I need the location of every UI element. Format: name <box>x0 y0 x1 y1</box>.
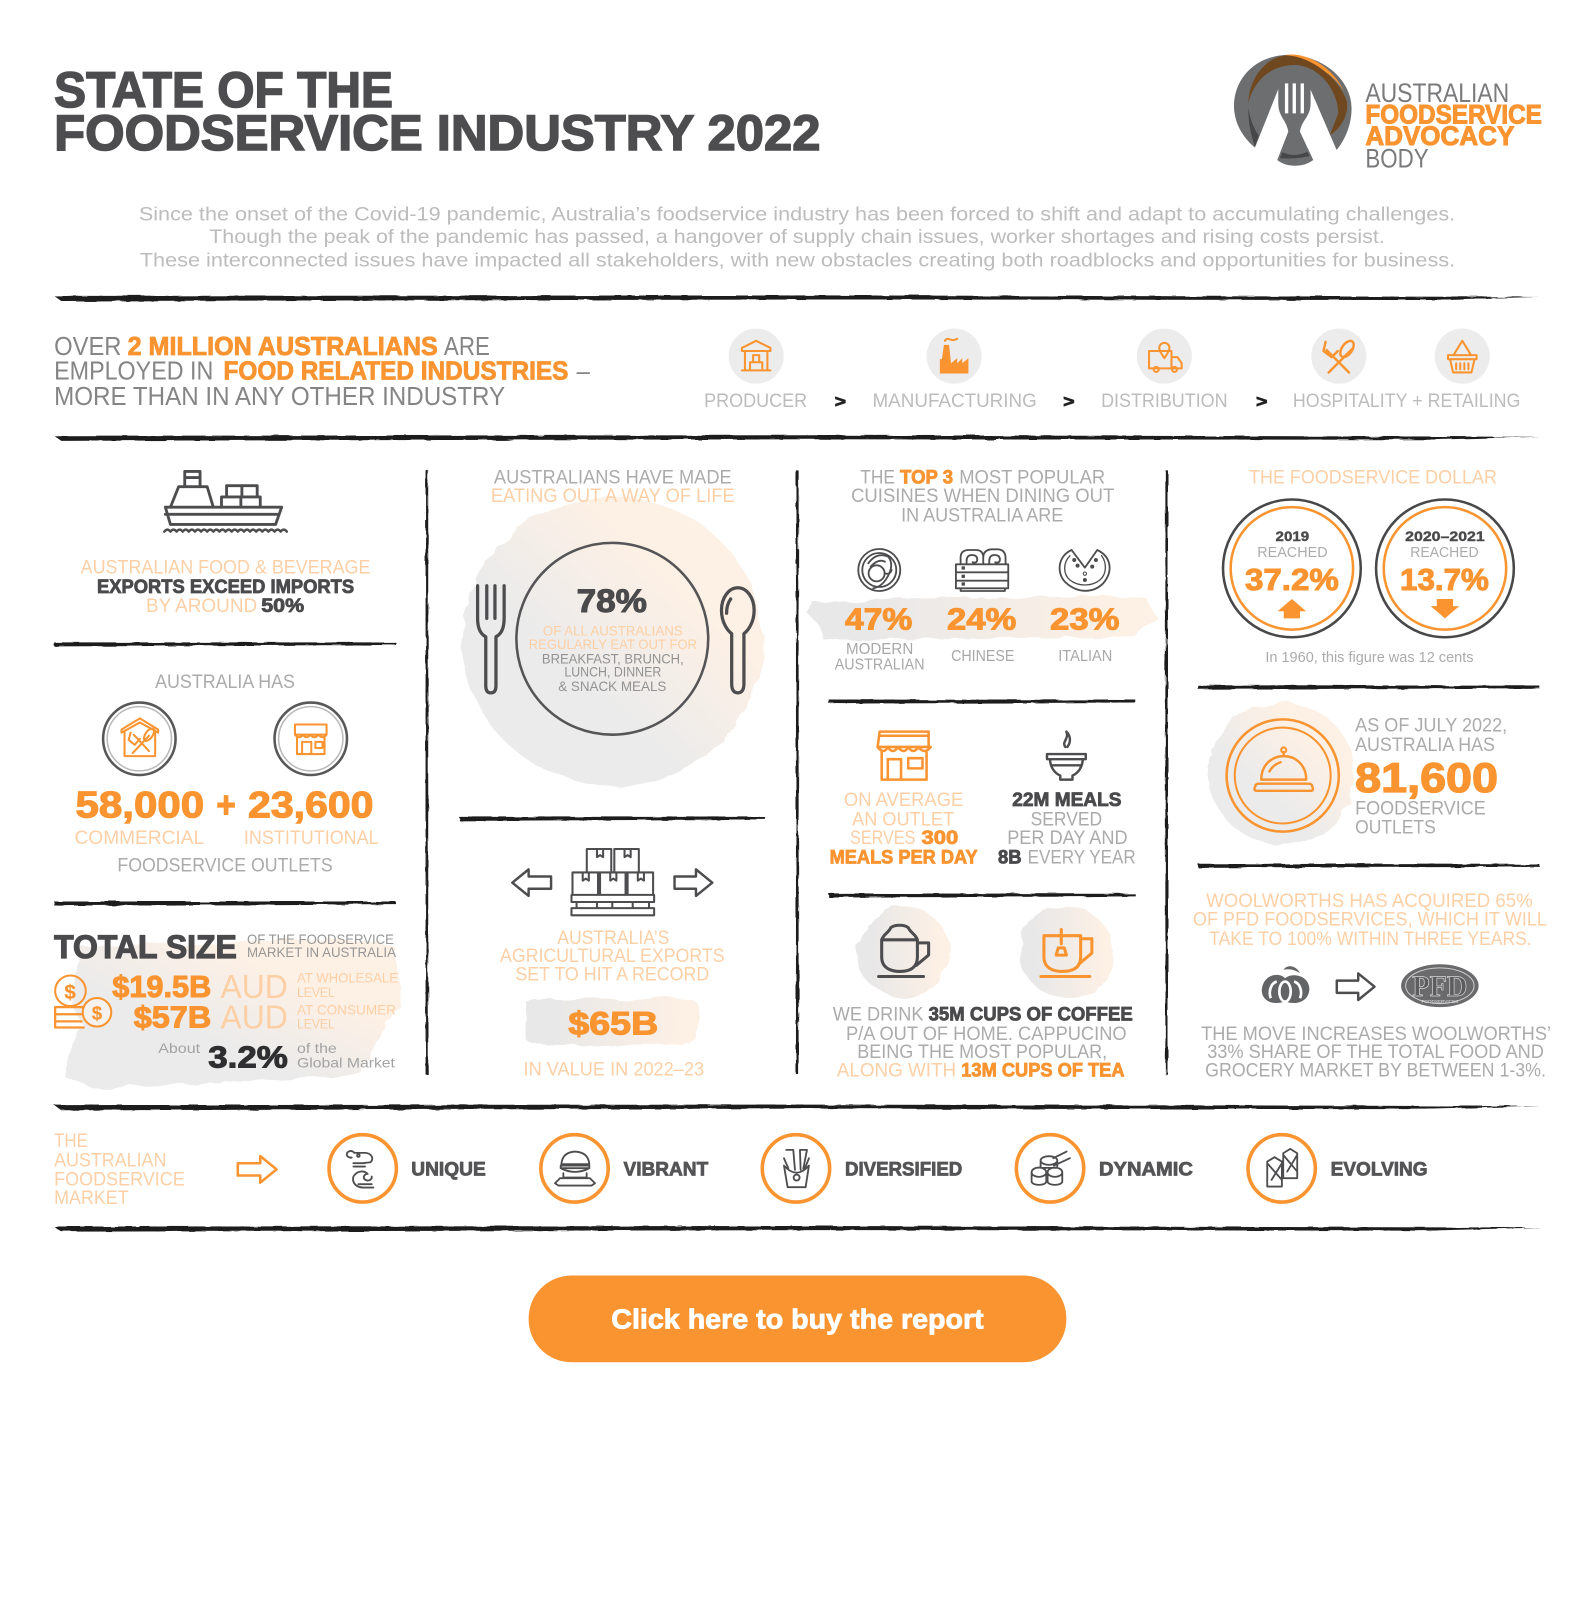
coffee and tea text: ALONG WITH <box>837 1060 956 1082</box>
trait: diversified: DIVERSIFIED <box>845 1159 962 1181</box>
arrow: down <box>1431 599 1459 618</box>
icon: producer <box>729 329 784 384</box>
exports text: BY AROUND <box>146 595 257 617</box>
market share text: GROCERY MARKET BY BETWEEN 1-3%. <box>1205 1060 1546 1082</box>
heading: EATING OUT A WAY OF LIFE <box>491 485 735 507</box>
panel: agricultural exports <box>500 849 725 1081</box>
employment statement: 2 MILLION AUSTRALIANS <box>128 333 438 361</box>
market heading <box>54 1130 185 1209</box>
average outlet text: ON AVERAGE <box>844 789 963 811</box>
icon: PFD logo: FOODSERVICES <box>1421 999 1458 1004</box>
cuisine names: AUSTRALIAN <box>835 656 925 673</box>
heading: AUSTRALIA HAS <box>155 671 295 693</box>
title <box>54 62 820 161</box>
divider rules <box>54 295 1540 1232</box>
coffee and tea text <box>833 1003 1133 1082</box>
badge: 2020-2021: REACHED <box>1410 545 1479 561</box>
outlet text: FOODSERVICE <box>1355 797 1486 819</box>
arrow: woolworths to PFD <box>1337 973 1375 1000</box>
icon: outlet store <box>878 732 931 780</box>
arrow: up <box>1278 599 1306 618</box>
trait: unique <box>329 1135 486 1202</box>
trait: evolving <box>1248 1135 1428 1202</box>
coffee and tea text: 13M CUPS OF TEA <box>961 1060 1125 1082</box>
trait: evolving: EVOLVING <box>1331 1159 1428 1181</box>
badge: 2019: 37.2% <box>1245 563 1339 597</box>
outlet text: 81,600 <box>1355 754 1498 801</box>
button: buy the report <box>529 1276 1066 1362</box>
exports text: AUSTRALIA’S <box>557 927 669 949</box>
supply chain icons and labels <box>704 329 1520 412</box>
plate stat: BREAKFAST, BRUNCH, <box>542 651 684 667</box>
employment statement: FOOD RELATED INDUSTRIES <box>224 358 568 386</box>
consumer figures: $57B <box>134 1001 211 1035</box>
icon: fork <box>478 586 504 693</box>
outlet labels <box>75 827 379 876</box>
brush background <box>527 999 698 1045</box>
supply chain labels: HOSPITALITY + RETAILING <box>1293 390 1520 412</box>
trait: vibrant: VIBRANT <box>624 1159 708 1181</box>
badge: 2019: 2019 <box>1276 529 1309 545</box>
arrow: right <box>675 869 712 896</box>
badge: 2020-2021: 13.7% <box>1400 563 1489 597</box>
employment statement <box>54 333 591 411</box>
logo wordmark <box>1365 78 1542 173</box>
icon: fries <box>784 1150 809 1187</box>
icon: commercial outlets <box>103 703 176 775</box>
outlet labels: COMMERCIAL <box>75 827 204 849</box>
badge: 2020-2021: 2020–2021 <box>1405 529 1485 545</box>
market share text: 33% SHARE OF THE TOTAL FOOD AND <box>1207 1041 1544 1063</box>
trait: diversified <box>762 1135 962 1202</box>
export value: $65B <box>568 1005 658 1042</box>
plate stat: OF ALL AUSTRALIANS <box>543 624 683 640</box>
intro paragraph <box>139 203 1455 271</box>
heading: THE <box>860 467 895 489</box>
trait: dynamic <box>1016 1135 1193 1202</box>
percentages: 23% <box>1050 603 1119 637</box>
supply chain labels: PRODUCER <box>704 390 807 412</box>
panel: total size <box>54 928 400 1088</box>
panel: foodservice dollar <box>1223 467 1514 666</box>
percentages: 47% <box>845 603 912 637</box>
wholesale figures <box>112 969 398 1006</box>
total meals text: 22M MEALS <box>1012 789 1122 811</box>
supply chain labels: MANUFACTURING <box>872 390 1037 412</box>
panel: meals served <box>830 732 1136 868</box>
logo wordmark: FOODSERVICE <box>1365 99 1542 129</box>
outlet numbers <box>76 784 374 825</box>
employment statement: OVER <box>54 333 121 361</box>
brush background <box>1209 702 1354 845</box>
logo: Australian Foodservice Advocacy Body <box>1234 55 1542 173</box>
market share text: THE MOVE INCREASES WOOLWORTHS’ <box>1201 1023 1551 1045</box>
heading: TOTAL SIZE <box>54 928 237 965</box>
cuisine names: MODERN <box>846 641 913 658</box>
icon: manufacturing <box>927 329 982 384</box>
trait: unique: UNIQUE <box>411 1159 486 1181</box>
icon: spoon <box>721 588 754 693</box>
plate stat: REGULARLY EAT OUT FOR <box>529 637 697 653</box>
supply chain labels: > <box>1063 393 1075 411</box>
coffee and tea text: 35M CUPS OF COFFEE <box>929 1003 1133 1025</box>
cuisine names: CHINESE <box>951 648 1014 665</box>
coffee and tea text: WE DRINK <box>833 1003 924 1025</box>
exports text: AGRICULTURAL EXPORTS <box>500 945 725 967</box>
outlet text: AUSTRALIA HAS <box>1355 734 1495 756</box>
arrow: left <box>512 869 551 896</box>
icon: burger <box>555 1152 595 1186</box>
logo wordmark: BODY <box>1365 143 1429 173</box>
icon: tea cup <box>1041 930 1092 977</box>
badge: 2020-2021 <box>1376 499 1514 637</box>
icon: PFD logo <box>1401 964 1479 1007</box>
logo wordmark: AUSTRALIAN <box>1365 78 1509 108</box>
exports text: AUSTRALIAN FOOD & BEVERAGE <box>81 556 371 578</box>
outlet text: OUTLETS <box>1355 817 1436 839</box>
market heading: AUSTRALIAN <box>54 1149 166 1171</box>
plate stat: LUNCH, DINNER <box>564 665 661 681</box>
wholesale figures: LEVEL <box>297 985 335 1001</box>
global share <box>158 1040 395 1074</box>
average outlet text: AN OUTLET <box>852 809 954 831</box>
icon: modern australian dish <box>858 549 900 591</box>
acquisition text: TAKE TO 100% WITHIN THREE YEARS. <box>1209 928 1532 950</box>
cuisine names <box>835 641 1112 673</box>
total meals text: PER DAY AND <box>1007 827 1128 849</box>
icon: coins: $ <box>64 982 76 1004</box>
plate stat <box>529 582 697 695</box>
icon: hospitality <box>1311 329 1366 384</box>
market heading: THE <box>54 1130 88 1152</box>
brush backgrounds <box>856 907 1113 997</box>
exports text <box>81 556 371 617</box>
coffee and tea text: BEING THE MOST POPULAR, <box>857 1041 1107 1063</box>
outlet numbers: + <box>216 784 236 825</box>
outlet text <box>1355 715 1507 839</box>
icon: retailing <box>1435 329 1490 384</box>
icon: distribution <box>1137 329 1192 384</box>
heading: AUSTRALIANS HAVE MADE <box>494 467 732 489</box>
heading: CUISINES WHEN DINING OUT <box>851 485 1114 507</box>
global share: 3.2% <box>208 1040 288 1074</box>
supply chain labels <box>704 390 1520 412</box>
icon: coins: $ <box>92 1002 102 1023</box>
heading <box>851 467 1114 526</box>
panel: 81,600 outlets <box>1209 702 1507 845</box>
heading: MARKET IN AUSTRALIA <box>247 945 396 961</box>
heading: MOST POPULAR <box>959 467 1105 489</box>
employment statement: ARE <box>444 333 490 361</box>
icon: pallet boxes <box>571 849 654 915</box>
acquisition text <box>1193 890 1547 950</box>
outlet numbers: 23,600 <box>248 784 374 825</box>
badge: 2019 <box>1223 499 1361 637</box>
intro paragraph: These interconnected issues have impacted all stakeholders, with new obstacles creating both roadblocks and opportunities for business. <box>140 249 1455 271</box>
plate stat: 78% <box>577 582 647 619</box>
plate stat: & SNACK MEALS <box>558 679 666 695</box>
icon: wraps <box>1267 1149 1297 1187</box>
average outlet text: MEALS PER DAY <box>830 846 978 868</box>
badge: 2019: REACHED <box>1257 545 1328 561</box>
outlet labels: INSTITUTIONAL <box>244 827 379 849</box>
title: FOODSERVICE INDUSTRY 2022 <box>54 105 820 161</box>
icon: coins <box>55 976 111 1028</box>
total meals text: SERVED <box>1031 809 1102 831</box>
panel: outlets count <box>75 671 379 876</box>
exports text: EXPORTS EXCEED IMPORTS <box>97 576 354 598</box>
icon: chinese steamer <box>956 549 1008 591</box>
supply chain labels: > <box>1256 393 1267 411</box>
heading <box>491 467 735 507</box>
icon: PFD logo: PFD <box>1412 971 1467 1003</box>
heading <box>54 928 396 965</box>
wholesale figures: $19.5B <box>112 970 211 1004</box>
value year: IN VALUE IN 2022–23 <box>524 1059 704 1081</box>
brush background <box>462 497 762 785</box>
intro paragraph: Though the peak of the pandemic has passed, a hangover of supply chain issues, worker shortages and rising costs persist. <box>209 226 1385 248</box>
supply chain labels: > <box>835 393 846 411</box>
logo wordmark: ADVOCACY <box>1365 121 1515 151</box>
icon: coffee cup <box>879 925 929 977</box>
total meals text: 8B <box>998 846 1021 868</box>
percentages: 24% <box>947 603 1016 637</box>
brush background <box>63 939 400 1088</box>
arrow: to traits <box>238 1156 277 1183</box>
acquisition text: WOOLWORTHS HAS ACQUIRED 65% <box>1206 890 1533 912</box>
icon: logo plate and fork <box>1234 55 1352 166</box>
icon: italian pizza <box>1060 550 1110 591</box>
global share: of the <box>297 1041 337 1057</box>
percentages <box>845 603 1119 637</box>
acquisition text: OF PFD FOODSERVICES, WHICH IT WILL <box>1193 909 1547 931</box>
consumer figures <box>134 1000 396 1037</box>
global share: About <box>158 1041 200 1057</box>
panel: top cuisines <box>806 467 1156 673</box>
outlet text: AS OF JULY 2022, <box>1355 715 1507 737</box>
exports text: 50% <box>261 595 304 617</box>
panel: market traits <box>54 1130 1428 1209</box>
market heading: MARKET <box>54 1187 129 1209</box>
panel: eating out <box>462 467 762 785</box>
consumer figures: AUD <box>220 1000 288 1037</box>
global share: Global Market <box>297 1055 395 1071</box>
button: buy the report: Click here to buy the report <box>611 1304 984 1335</box>
icon: prawns <box>347 1151 373 1188</box>
icon: institutional outlets <box>275 703 347 775</box>
total meals text: EVERY YEAR <box>1028 846 1136 868</box>
trait: vibrant <box>541 1135 708 1202</box>
icon: steaming bowl <box>1047 732 1086 780</box>
exports text <box>500 927 725 986</box>
employment statement: MORE THAN IN ANY OTHER INDUSTRY <box>54 383 505 411</box>
icon: cloche ring <box>1227 719 1339 832</box>
heading: IN AUSTRALIA ARE <box>901 504 1063 526</box>
average outlet text <box>830 789 978 868</box>
wholesale figures: AUD <box>220 969 288 1006</box>
brush background <box>806 597 1156 641</box>
employment statement: EMPLOYED IN <box>54 358 213 386</box>
heading: THE FOODSERVICE DOLLAR <box>1249 467 1497 489</box>
intro paragraph: Since the onset of the Covid-19 pandemic, Australia’s foodservice industry has been forced to shift and adapt to accumulating challenges. <box>139 203 1455 225</box>
icon: cargo ship <box>164 471 287 532</box>
market share text <box>1201 1023 1551 1082</box>
employment statement: – <box>577 358 591 386</box>
panel: woolworths acquisition <box>1193 890 1551 1082</box>
supply chain labels: DISTRIBUTION <box>1101 390 1228 412</box>
plate <box>516 543 708 735</box>
panel: exports exceed imports <box>81 471 371 617</box>
cuisine names: ITALIAN <box>1058 648 1112 665</box>
consumer figures: AT CONSUMER <box>297 1002 396 1018</box>
panel: coffee and tea <box>833 907 1133 1082</box>
outlet labels: FOODSERVICE OUTLETS <box>117 854 333 876</box>
market heading: FOODSERVICE <box>54 1169 185 1191</box>
heading: TOP 3 <box>900 467 953 489</box>
average outlet text: SERVES <box>850 827 915 849</box>
average outlet text: 300 <box>921 827 958 849</box>
wholesale figures: AT WHOLESALE <box>297 971 398 987</box>
total meals text <box>998 789 1136 868</box>
title: STATE OF THE <box>54 62 393 118</box>
trait: dynamic: DYNAMIC <box>1099 1159 1193 1181</box>
heading: OF THE FOODSERVICE <box>247 932 394 948</box>
icon: woolworths logo <box>1262 966 1309 1003</box>
footnote: In 1960, this figure was 12 cents <box>1265 650 1474 666</box>
exports text: SET TO HIT A RECORD <box>515 964 709 986</box>
outlet numbers: 58,000 <box>76 784 204 825</box>
consumer figures: LEVEL <box>297 1017 335 1033</box>
icon: sushi rolls <box>1032 1152 1070 1185</box>
coffee and tea text: P/A OUT OF HOME. CAPPUCINO <box>846 1023 1127 1045</box>
